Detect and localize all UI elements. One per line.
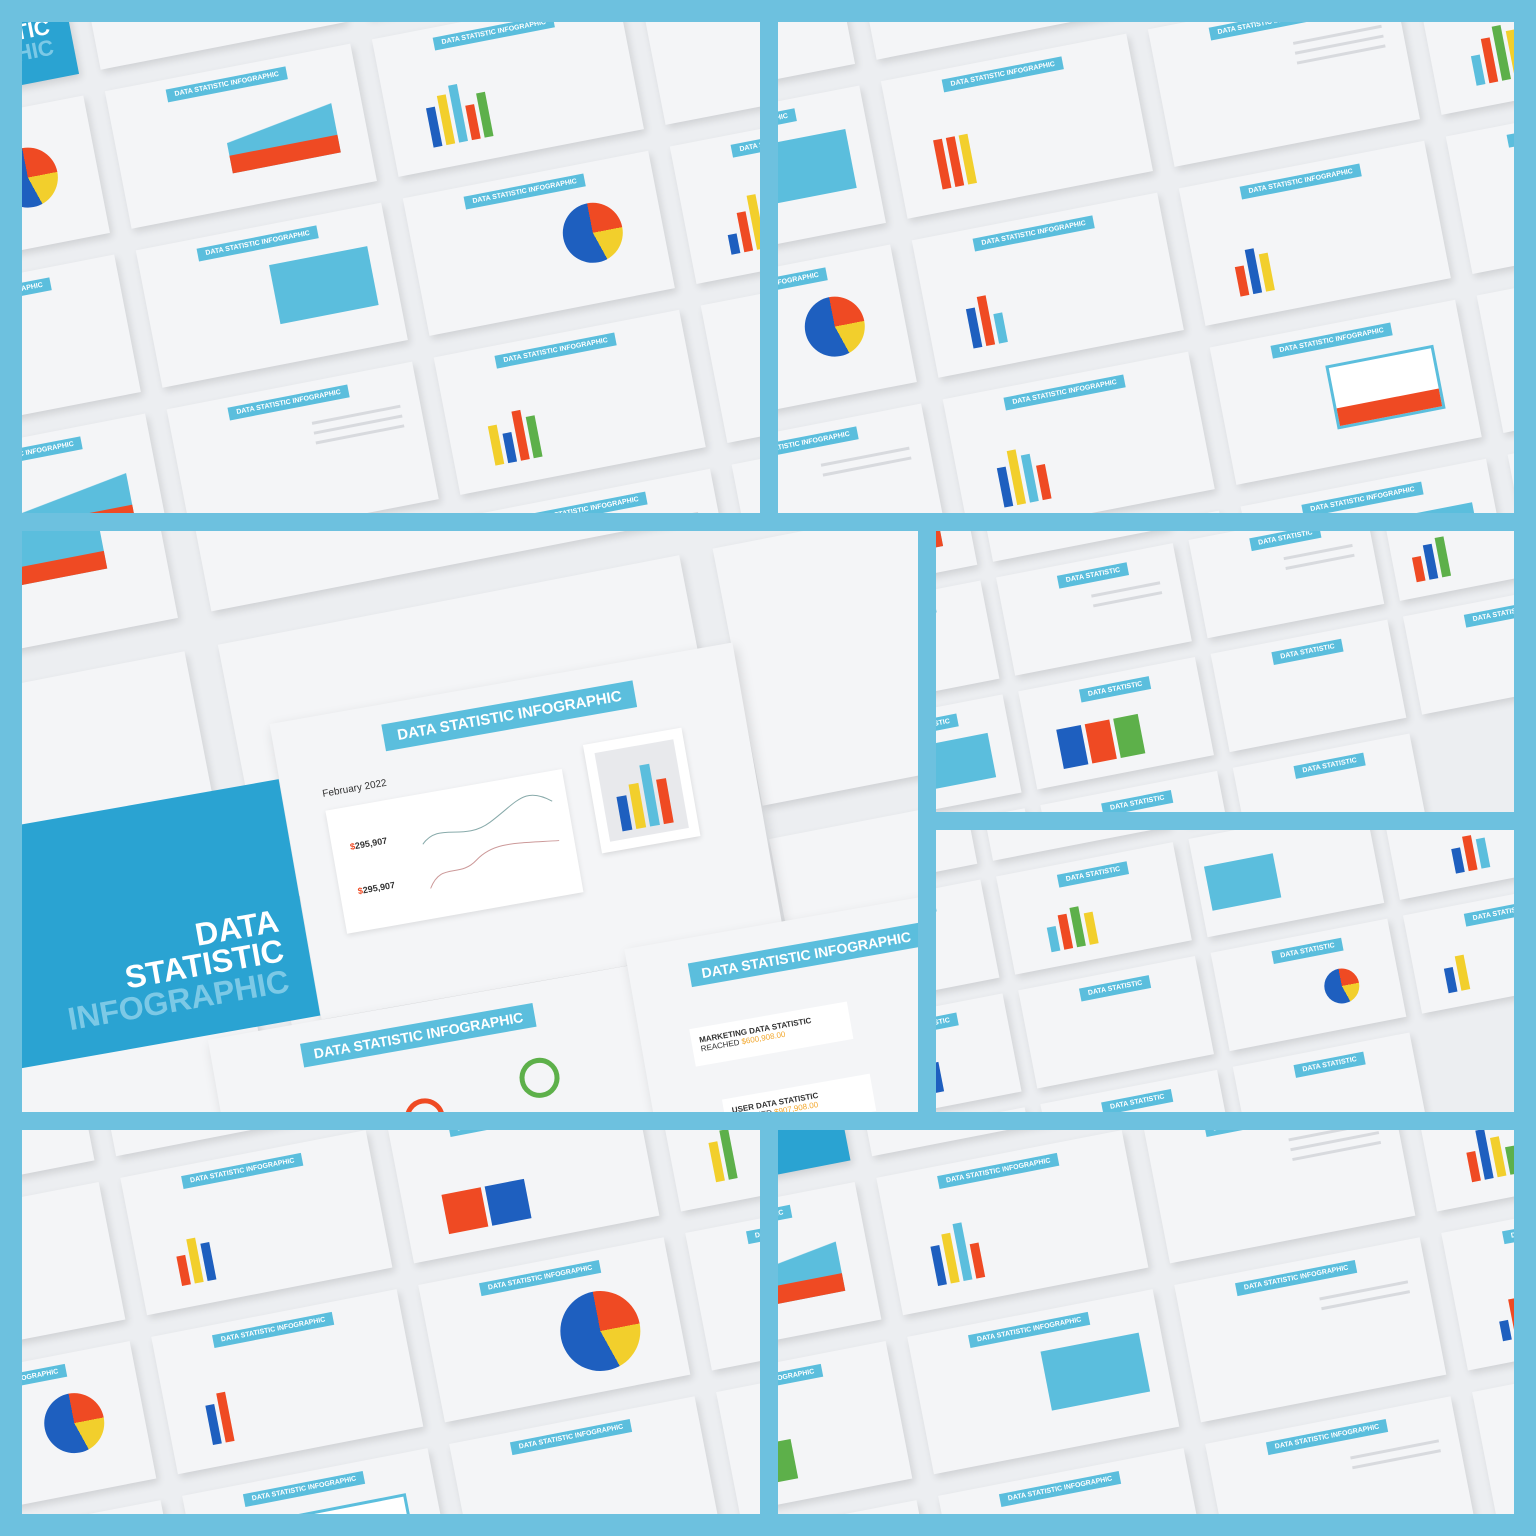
slide grid — [22, 22, 760, 513]
slide grid: DATA STATISTIC INFOGRAPHIC — [518, 1423, 624, 1451]
slide grid: DATA STATISTIC INFOGRAPHIC — [1279, 327, 1384, 354]
title card: data statistic infographic: INFOGRAPHIC — [65, 962, 292, 1037]
slide grid: DATA STATISTIC INFOGRAPHIC — [1007, 1475, 1113, 1503]
title card: data statistic infographic: STATISTIC — [122, 932, 287, 996]
bar chart box — [583, 728, 700, 853]
slide grid: DATA STATISTIC INFOGRAPHIC — [190, 1157, 295, 1184]
slide grid — [936, 531, 1514, 812]
slide grid: DATA STATISTIC INFOGRAPHIC — [472, 178, 578, 205]
title card: data statistic infographic: DATA — [192, 903, 281, 953]
panel: bottom-right collage — [778, 1130, 1514, 1514]
panel: bottom-left collage — [22, 1130, 760, 1514]
slide grid: DATA STATISTIC INFOGRAPHIC — [976, 1316, 1082, 1344]
slide grid: DATA STATISTIC — [1065, 567, 1121, 584]
line chart box: February 2022 — [322, 778, 388, 800]
slide grid: DATA STATISTIC — [1087, 681, 1143, 698]
line chart box — [325, 769, 583, 934]
slide grid: DATA STATISTIC — [1302, 757, 1357, 774]
slide grid: DATA STATISTIC INFOGRAPHIC — [487, 1264, 593, 1292]
line chart box: $295,907 — [357, 880, 396, 896]
slide grid: DATA STATISTIC INFOGRAPHIC — [946, 1157, 1051, 1184]
slide grid: DATA STATISTIC INFOGRAPHIC — [1274, 1423, 1380, 1451]
slide grid: DATA STATISTIC INFOGRAPHIC — [1012, 379, 1117, 406]
slide: marketing data statistic — [624, 876, 1080, 1186]
slide: marketing data statistic: DATA STATISTIC INFOGRAPHIC — [700, 928, 912, 981]
slide grid — [778, 1130, 1514, 1514]
slide grid: DATA STATISTIC INFOGRAPHIC — [220, 1316, 326, 1344]
slide: data statistic infographic lower — [208, 965, 666, 1237]
slide grid: DATA STATISTIC INFOGRAPHIC — [1310, 486, 1415, 513]
slide grid: DATA STATISTIC INFOGRAPHIC — [1243, 1264, 1349, 1292]
line chart box: $295,907 — [349, 836, 388, 852]
title card: data statistic infographic — [0, 779, 320, 1073]
slide grid: DATA STATISTIC — [1110, 794, 1165, 812]
slide: february 2022 — [270, 642, 784, 1020]
title bar: DATA STATISTIC INFOGRAPHIC — [396, 688, 623, 744]
slide grid: DATA STATISTIC INFOGRAPHIC — [950, 61, 1056, 88]
slide grid: DATA STATISTIC INFOGRAPHIC — [503, 337, 608, 364]
slide grid: DATA STATISTIC — [1280, 942, 1335, 960]
slide grid — [936, 830, 1514, 1112]
slide grid: DATA STATISTIC INFOGRAPHIC — [174, 71, 280, 98]
slide grid: DATA STATISTIC INFOGRAPHIC — [236, 389, 341, 416]
slide grid — [778, 22, 1514, 513]
slide grid: DATA STATISTIC INFOGRAPHIC — [981, 220, 1087, 247]
slide: data statistic infographic lower: DATA STATISTIC INFOGRAPHIC — [313, 1009, 524, 1062]
slide grid: DATA STATISTIC — [1302, 1056, 1357, 1073]
panel: top-left collage — [22, 22, 760, 513]
slide grid: DATA STATISTIC — [1280, 643, 1335, 661]
slide grid: DATA STATISTIC INFOGRAPHIC — [205, 230, 311, 257]
slide grid: DATA STATISTIC INFOGRAPHIC — [1248, 168, 1354, 195]
panel: large center collage — [22, 531, 918, 1112]
slide: marketing data statistic: MARKETING DATA STATISTIC — [698, 1016, 812, 1045]
slide grid: DATA STATISTIC INFOGRAPHIC — [251, 1475, 357, 1503]
slide grid — [22, 1130, 760, 1514]
panel: middle-right upper collage — [936, 531, 1514, 812]
panel: top-right collage — [778, 22, 1514, 513]
slide: marketing data statistic: REACHED $600,908.00 — [700, 1030, 786, 1053]
slide grid: DATA STATISTIC — [1110, 1093, 1165, 1111]
panel: middle-right lower collage — [936, 830, 1514, 1112]
slide grid: DATA STATISTIC — [1087, 980, 1143, 997]
slide grid: DATA STATISTIC — [1065, 866, 1121, 883]
